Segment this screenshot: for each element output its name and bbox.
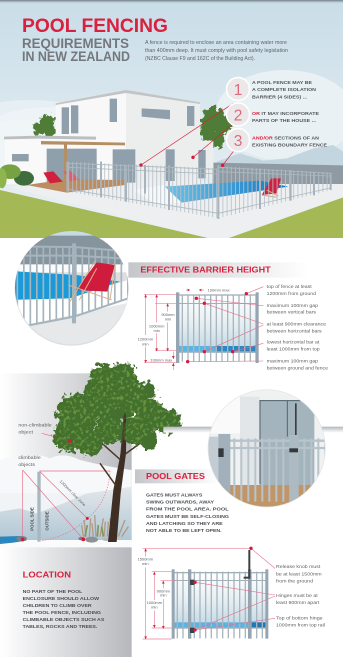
gate callout text: Release knob must [276,564,321,569]
gate dimension labels: min [160,593,167,598]
gate callout text: Hinges must be at [276,593,318,598]
callout text: between horizontal bars [267,328,322,333]
side labels [29,507,49,531]
numbered badge 3 [226,128,250,152]
callout text: lowest horizontal bar at [267,340,320,345]
requirement list: PARTS OF THE HOUSE ... [252,118,316,124]
callout pointers [186,287,263,363]
location panel: ENCLOSURE SHOULD ALLOW [23,596,100,601]
numbered badge 2 [226,103,250,126]
gate dimension labels: 900mm [157,588,171,593]
section: effective barrier height [10,228,328,370]
pool gates body text: NOT ABLE TO BE LEFT OPEN. [146,528,222,533]
dimension labels: min [142,341,149,346]
numbered badge 3: 3 [234,133,242,150]
dimension labels: 1000mm [149,323,165,328]
house and pool illustration [0,90,343,240]
paving [7,170,343,239]
red pointer lines [139,103,235,167]
fence rails and posts [67,162,331,219]
requirement list: EXISTING BOUNDARY FENCE [252,142,328,148]
main upper house [56,92,126,178]
clear zone label: 1200mm clear zone [59,479,87,508]
heading band: EFFECTIVE BARRIER HEIGHT [140,265,271,275]
gate dimension labels [138,557,171,609]
intro text: (NZBC Clause F9 and 162C of the Building Act). [145,56,255,62]
section background: white [0,238,343,657]
numbered badge 1: 1 [234,82,242,99]
title: REQUIREMENTS [22,36,129,51]
requirement list: AND/OR SECTIONS OF AN [252,136,320,142]
red dots [21,439,89,541]
distant hills [217,145,343,167]
pool gates body text: SWING OUTWARDS, AWAY [146,499,214,504]
left scene background [0,373,132,548]
callout text: between vertical bars [267,310,317,315]
object labels: object [18,430,34,435]
pool gates body text: GATES MUST BE SELF-CLOSING [146,514,230,519]
gate arrowheads [144,548,165,639]
windows [12,99,206,183]
title [22,15,168,64]
side labels: OUTSIDE [44,511,49,531]
callout text: maximum 100mm gap [267,358,318,363]
gate callout text [276,564,325,628]
pool gates body text [146,492,230,533]
requirement list: BARRIER (4 SIDES) ... [252,94,307,100]
left fence [68,162,218,218]
gate callout text: be at least 1500mm [276,571,322,576]
callout text: least 1000mm from top [267,347,320,352]
title: POOL FENCING [22,15,168,37]
water edge [0,536,27,544]
pool gates body text: AND LATCHING SO THEY ARE [146,521,223,526]
section: location scene and pool gates [0,363,343,548]
tree [53,363,180,542]
location panel: LOCATION [23,569,71,579]
dashed clear zone arc and lines [23,433,110,541]
object labels: climbable [18,455,41,460]
numbered badge 1 [226,78,250,100]
plants and rocks [16,515,128,543]
boundary wall [213,163,343,184]
dimension labels: 100mm max [208,288,230,293]
location panel: CHILDREN TO CLIMB OVER [23,603,93,608]
grass [0,190,217,240]
tree behind house right [199,107,231,147]
numbered badge 2: 2 [234,108,242,124]
dimension lines [144,290,204,370]
gate callout text: Top of bottom hinge [276,616,323,621]
pool gates heading [135,469,218,483]
callout text: top of fence at least [267,284,312,289]
intro text [145,40,288,62]
tree behind house left [33,115,57,137]
circle: chair by pool [14,231,129,346]
location panel: THE POOL FENCE, INCLUDING [23,610,102,615]
dimension labels: 100mm max [150,358,172,363]
right fence [219,166,332,218]
gate dimension labels: min [151,604,158,609]
deck [27,179,125,193]
pool gates heading: POOL GATES [146,471,205,481]
callout text: between ground and fence [267,365,328,370]
side labels: POOL SIDE [29,507,34,531]
gate diagram [172,569,268,639]
pergola [41,141,125,145]
dimension labels: 900mm [161,312,175,317]
dimension labels: 1200mm [138,337,154,342]
callout text: at least 900mm clearance [267,321,326,326]
dimension labels: min [153,328,160,333]
gate dimension labels: 1000mm [147,600,163,605]
gate callout text: least 900mm apart [276,600,320,605]
gate dimension labels: min [142,561,149,566]
location panel [0,547,132,657]
requirement list: A COMPLETE ISOLATION [252,87,317,93]
callout text: 1200mm from ground [267,291,316,296]
requirement list: OR IT MAY INCORPORATE [252,111,320,117]
section: location and gate diagram [0,547,325,657]
circle: gate detail [207,389,327,508]
dimension labels: min [165,317,171,322]
requirement list: A POOL FENCE MAY BE [252,80,313,86]
dimension arrowheads [144,289,201,366]
callout text [267,284,328,370]
location panel: TABLES, ROCKS AND TREES. [23,624,97,629]
intro text: than 400mm deep. It must comply with pool safety legislation [145,48,288,54]
object labels: objects [18,462,36,467]
bushes [0,164,34,188]
gate pointers [193,547,275,632]
gates band shadow [163,427,343,433]
pool [163,181,288,203]
pool gates body text: GATES MUST ALWAYS [146,492,202,497]
dimension labels [138,288,230,363]
release knob and hinges [190,550,250,633]
gate callout text: from the ground [276,578,313,583]
gate callout text: 1000mm from top rail [276,623,325,628]
title: IN NEW ZEALAND [22,49,130,64]
location panel: NO PART OF THE POOL [23,589,83,594]
object labels: non-climbable [18,422,52,427]
intro text: A fence is required to enclose an area containing water more [145,40,287,46]
requirement list [252,80,328,148]
fence diagram [176,292,259,363]
pool gates body text: FROM THE POOL AREA. POOL [146,507,229,512]
gate dimension labels: 1500mm [138,557,154,562]
fence post [37,472,41,542]
object labels [18,422,52,467]
red chairs [43,171,63,183]
lower house [5,138,125,184]
callout text: maximum 100mm gap [267,303,318,308]
location panel: CLIMBABLE OBJECTS SUCH AS [23,617,104,622]
right chair [262,178,281,195]
heading band [128,262,308,278]
hero scene background: sky [0,0,343,238]
gate dimension lines [143,548,251,639]
